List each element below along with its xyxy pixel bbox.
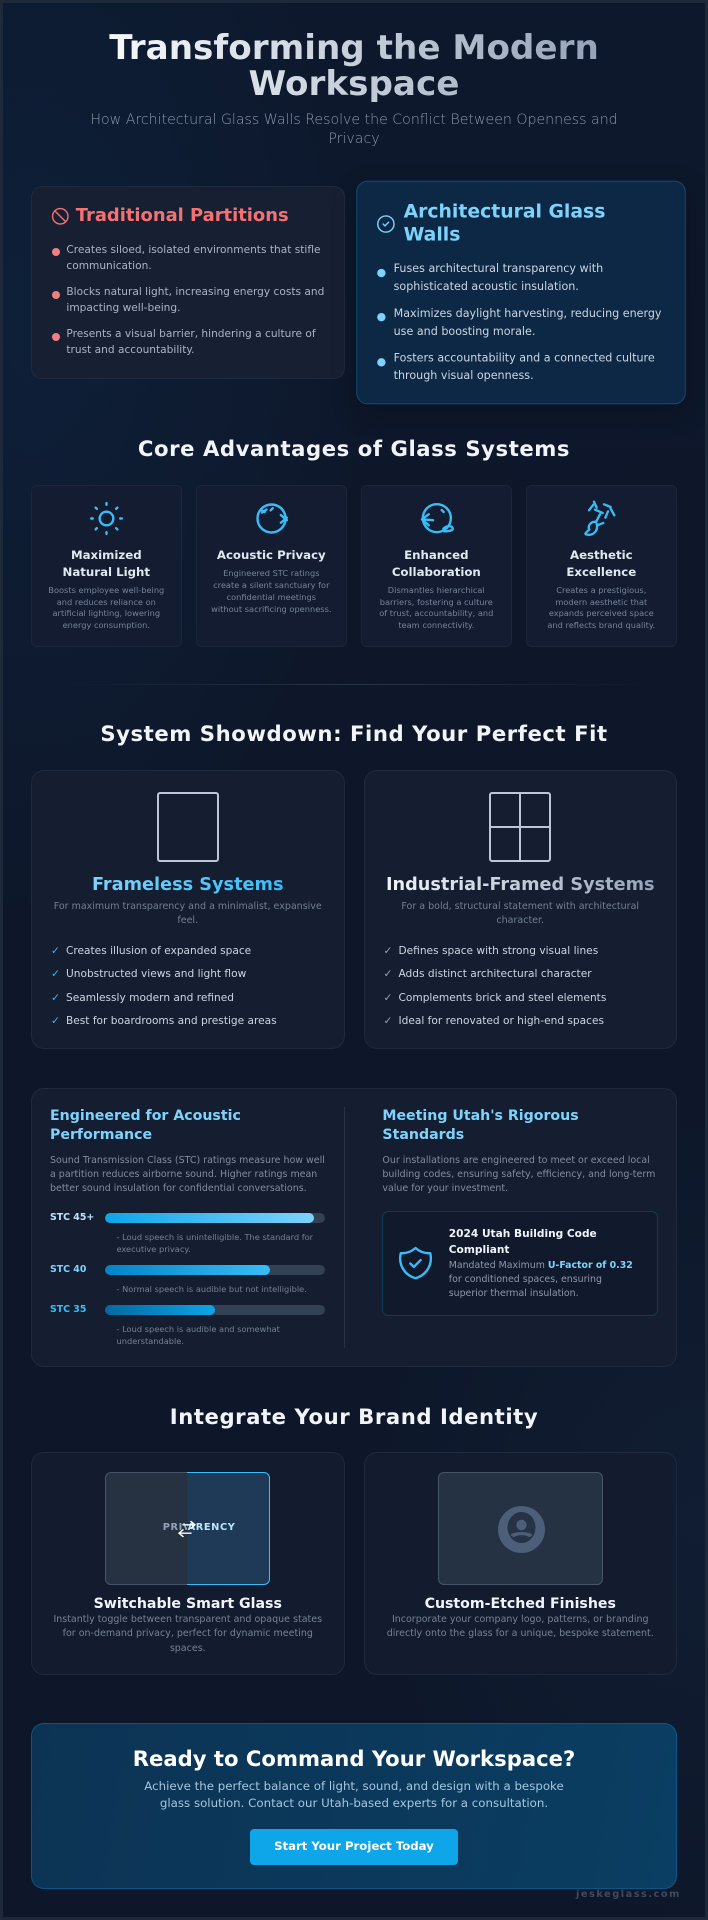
callout text <box>449 1259 633 1301</box>
heading: utah standards: Standards <box>382 1127 464 1143</box>
bullet 2 <box>376 313 385 321</box>
feature 3: ✓ <box>51 992 60 1004</box>
heading: acoustic performance: Performance <box>50 1127 152 1143</box>
card title: Acoustic Privacy <box>217 548 326 562</box>
card text <box>31 1613 344 1656</box>
card text: modern aesthetic that <box>555 597 647 607</box>
text 3 <box>66 328 316 356</box>
system title: Industrial-Framed Systems <box>386 875 655 895</box>
card text: Dismantles hierarchical <box>388 585 485 595</box>
privacy half <box>105 1472 187 1585</box>
callout: code compliance <box>382 1211 658 1316</box>
system subtitle: feel. <box>177 915 198 926</box>
panel: industrial-framed systems <box>364 770 677 1049</box>
card text: energy consumption. <box>63 620 150 630</box>
icon: ban <box>52 208 69 225</box>
icon: collaboration globe <box>420 503 454 534</box>
icon: acoustic globe <box>256 503 288 534</box>
heading: brand identity: Integrate Your Brand Identity <box>170 1404 538 1429</box>
standards paragraph: Our installations are engineered to meet or exceed local <box>382 1155 650 1166</box>
icon: sun <box>90 502 123 536</box>
feature 4: ✓ <box>384 1015 392 1027</box>
card text: Incorporate your company logo, patterns, or branding <box>392 1614 649 1625</box>
card text: barriers, fostering a culture <box>380 597 493 607</box>
icon: frameless pane <box>157 792 219 862</box>
feature 2: ✓ <box>51 968 60 980</box>
card title <box>63 548 150 579</box>
title: Workspace <box>249 64 459 104</box>
description: STC 35: understandable. <box>116 1336 184 1346</box>
heading: system showdown: System Showdown: Find Your Perfect Fit <box>100 721 608 746</box>
card text: artificial lighting, lowering <box>52 608 160 618</box>
card: acoustic privacy <box>196 485 347 647</box>
card title: Collaboration <box>392 565 481 579</box>
callout title: 2024 Utah Building Code <box>449 1228 597 1240</box>
callout title <box>449 1226 597 1259</box>
panel: traditional partitions <box>31 186 344 379</box>
card text: Instantly toggle between transparent and opaque states <box>53 1614 322 1625</box>
text 3: Fosters accountability and a connected culture <box>393 352 654 365</box>
text 2 <box>393 308 662 338</box>
card text: expands perceived space <box>549 608 654 618</box>
standards paragraph <box>382 1154 655 1196</box>
card text: team connectivity. <box>398 620 474 630</box>
bullet 1 <box>376 269 385 277</box>
heading: acoustic performance: Engineered for Acoustic <box>50 1108 241 1124</box>
card title: Aesthetic <box>570 548 633 562</box>
feature 4: Ideal for renovated or high-end spaces <box>398 1015 604 1027</box>
card text: directly onto the glass for a unique, bespoke statement. <box>387 1628 654 1639</box>
callout text: superior thermal insulation. <box>449 1288 579 1299</box>
transparency half <box>187 1472 270 1585</box>
panel: architectural glass walls <box>356 181 685 405</box>
icon: company logo <box>498 1506 544 1553</box>
text 2 <box>66 286 324 314</box>
text 3 <box>393 352 654 382</box>
system subtitle: For a bold, structural statement with architectural <box>401 901 639 912</box>
bar: STC 40 <box>105 1265 325 1275</box>
icon: sparkle brush <box>584 500 616 536</box>
description: STC 45+: - Loud speech is unintelligible. The standard for <box>116 1232 313 1242</box>
button <box>250 1829 458 1865</box>
card title: Excellence <box>566 565 636 579</box>
text 1 <box>66 244 321 272</box>
description: STC 45+ <box>116 1232 313 1254</box>
watermark: jeskeglass.com <box>576 1889 681 1900</box>
text 1: sophisticated acoustic insulation. <box>393 280 578 293</box>
system subtitle: character. <box>496 915 544 926</box>
feature 3: Seamlessly modern and refined <box>66 992 234 1004</box>
icon: framed pane <box>489 792 551 862</box>
card text: without sacrificing openness. <box>211 604 332 614</box>
text 1 <box>393 263 603 293</box>
bullet 3 <box>376 358 385 366</box>
button: Start Your Project Today <box>274 1839 434 1853</box>
system subtitle: For maximum transparency and a minimalist, expansive <box>54 901 322 912</box>
card title: Enhanced <box>404 548 468 562</box>
bullet 1 <box>52 248 60 256</box>
card text: spaces. <box>170 1643 206 1654</box>
text 2: Maximizes daylight harvesting, reducing energy <box>393 308 661 320</box>
card text: for on-demand privacy, perfect for dynamic meeting <box>63 1628 313 1639</box>
card text <box>48 585 164 630</box>
card text <box>364 1613 677 1642</box>
card title: Natural Light <box>63 565 150 579</box>
heading: architectural glass walls: Architectural Glass <box>403 201 605 223</box>
feature 1: Defines space with strong visual lines <box>398 944 598 956</box>
card text <box>379 585 493 630</box>
heading: architectural glass walls: Walls <box>403 224 460 246</box>
illustration: etched glass <box>438 1472 602 1585</box>
card text: Creates a prestigious, <box>556 585 646 595</box>
feature 4: Best for boardrooms and prestige areas <box>66 1015 277 1027</box>
acoustic paragraph: Sound Transmission Class (STC) ratings measure how well <box>50 1155 325 1166</box>
bar: STC 35 <box>105 1305 325 1315</box>
card text: of trust, accountability, and <box>379 608 493 618</box>
acoustic paragraph <box>50 1155 325 1194</box>
heading: traditional partitions: Traditional Partitions <box>76 205 289 226</box>
subtitle <box>90 112 618 146</box>
text 1: Creates siloed, isolated environments that stifle <box>66 244 321 256</box>
text 3: Presents a visual barrier, hindering a culture of <box>66 328 316 340</box>
card: aesthetic excellence <box>526 485 677 647</box>
feature 1: ✓ <box>51 944 60 956</box>
heading: utah standards: Meeting Utah's Rigorous <box>382 1108 579 1124</box>
panel: acoustic performance and standards <box>31 1088 677 1367</box>
text 3: through visual openness. <box>393 370 533 382</box>
text 2: use and boosting morale. <box>393 325 535 338</box>
description: STC 40: - Normal speech is audible but not intelligible. <box>116 1284 307 1294</box>
card: enhanced collaboration <box>361 485 512 647</box>
text 2: Blocks natural light, increasing energy costs and <box>66 286 324 298</box>
acoustic paragraph: a partition reduces airborne sound. Higher ratings mean <box>50 1169 317 1180</box>
system subtitle <box>401 901 639 926</box>
icon: switch arrows <box>175 1518 199 1538</box>
system title: Frameless Systems <box>92 875 284 895</box>
card text <box>547 585 655 630</box>
label: STC 45+: STC 45+ <box>50 1212 94 1223</box>
text 2: impacting well-being. <box>66 302 180 314</box>
icon: check circle <box>377 215 395 233</box>
call to action text <box>31 1778 677 1811</box>
panel: custom-etched finishes <box>364 1452 677 1675</box>
card text: and reduces reliance on <box>57 597 156 607</box>
description: STC 35: - Loud speech is audible and somewhat <box>116 1324 280 1334</box>
heading: architectural glass walls <box>403 201 605 246</box>
card: maximized natural light <box>31 485 182 647</box>
bullet 3 <box>52 333 60 341</box>
heading: acoustic performance <box>50 1108 241 1143</box>
call to action heading: Ready to Command Your Workspace? <box>133 1746 575 1771</box>
card title: Switchable Smart Glass <box>94 1596 282 1612</box>
card title <box>392 548 481 579</box>
callout title: Compliant <box>449 1244 509 1256</box>
feature 4: ✓ <box>51 1015 60 1027</box>
call to action text: glass solution. Contact our Utah-based experts for a consultation. <box>160 1796 548 1810</box>
card text: Boosts employee well-being <box>48 585 164 595</box>
card text: Engineered STC ratings <box>223 568 320 578</box>
feature 2: Adds distinct architectural character <box>398 968 592 980</box>
bullet 2 <box>52 291 60 299</box>
card title: Maximized <box>71 548 142 562</box>
description: STC 35 <box>116 1324 280 1346</box>
call to action text: Achieve the perfect balance of light, sound, and design with a bespoke <box>144 1779 564 1793</box>
heading: core advantages: Core Advantages of Glass Systems <box>138 436 570 461</box>
text 1: communication. <box>66 260 152 272</box>
card title: Custom-Etched Finishes <box>425 1596 616 1612</box>
feature 3: ✓ <box>384 992 392 1004</box>
text 3: trust and accountability. <box>66 344 194 356</box>
callout text: for conditioned spaces, ensuring <box>449 1274 602 1285</box>
label: STC 35: STC 35 <box>50 1304 86 1315</box>
feature 3: Complements brick and steel elements <box>398 992 606 1004</box>
card title <box>566 548 636 579</box>
feature 1: ✓ <box>384 944 392 956</box>
feature 2: Unobstructed views and light flow <box>66 968 246 980</box>
title: Transforming the Modern <box>109 28 599 68</box>
acoustic paragraph: better sound insulation for confidential conversations. <box>50 1183 307 1194</box>
text 1: Fuses architectural transparency with <box>393 263 603 275</box>
description: STC 45+: executive privacy. <box>116 1244 191 1254</box>
card text: confidential meetings <box>227 592 316 602</box>
standards paragraph: value for your investment. <box>382 1183 508 1194</box>
title <box>0 30 708 102</box>
card text: and reflects brand quality. <box>547 620 655 630</box>
feature 1: Creates illusion of expanded space <box>66 944 251 956</box>
panel: switchable smart glass <box>31 1452 344 1675</box>
system subtitle <box>54 901 322 926</box>
illustration: smart glass toggle <box>105 1472 270 1585</box>
callout text: Mandated Maximum U-Factor of 0.32 <box>449 1260 633 1271</box>
standards paragraph: building codes, ensuring safety, efficiency, and long-term <box>382 1169 655 1180</box>
panel: frameless systems <box>31 770 344 1049</box>
label: STC 40: STC 40 <box>50 1264 86 1275</box>
icon: shield check <box>395 1243 436 1284</box>
panel: call to action <box>31 1723 677 1889</box>
feature 2: ✓ <box>384 968 392 980</box>
subtitle: How Architectural Glass Walls Resolve the Conflict Between Openness and <box>90 112 618 128</box>
card text <box>211 568 332 614</box>
subtitle: Privacy <box>328 130 380 146</box>
bar: STC 45+ <box>105 1213 325 1223</box>
heading: utah standards <box>382 1108 579 1143</box>
card text: create a silent sanctuary for <box>213 580 330 590</box>
